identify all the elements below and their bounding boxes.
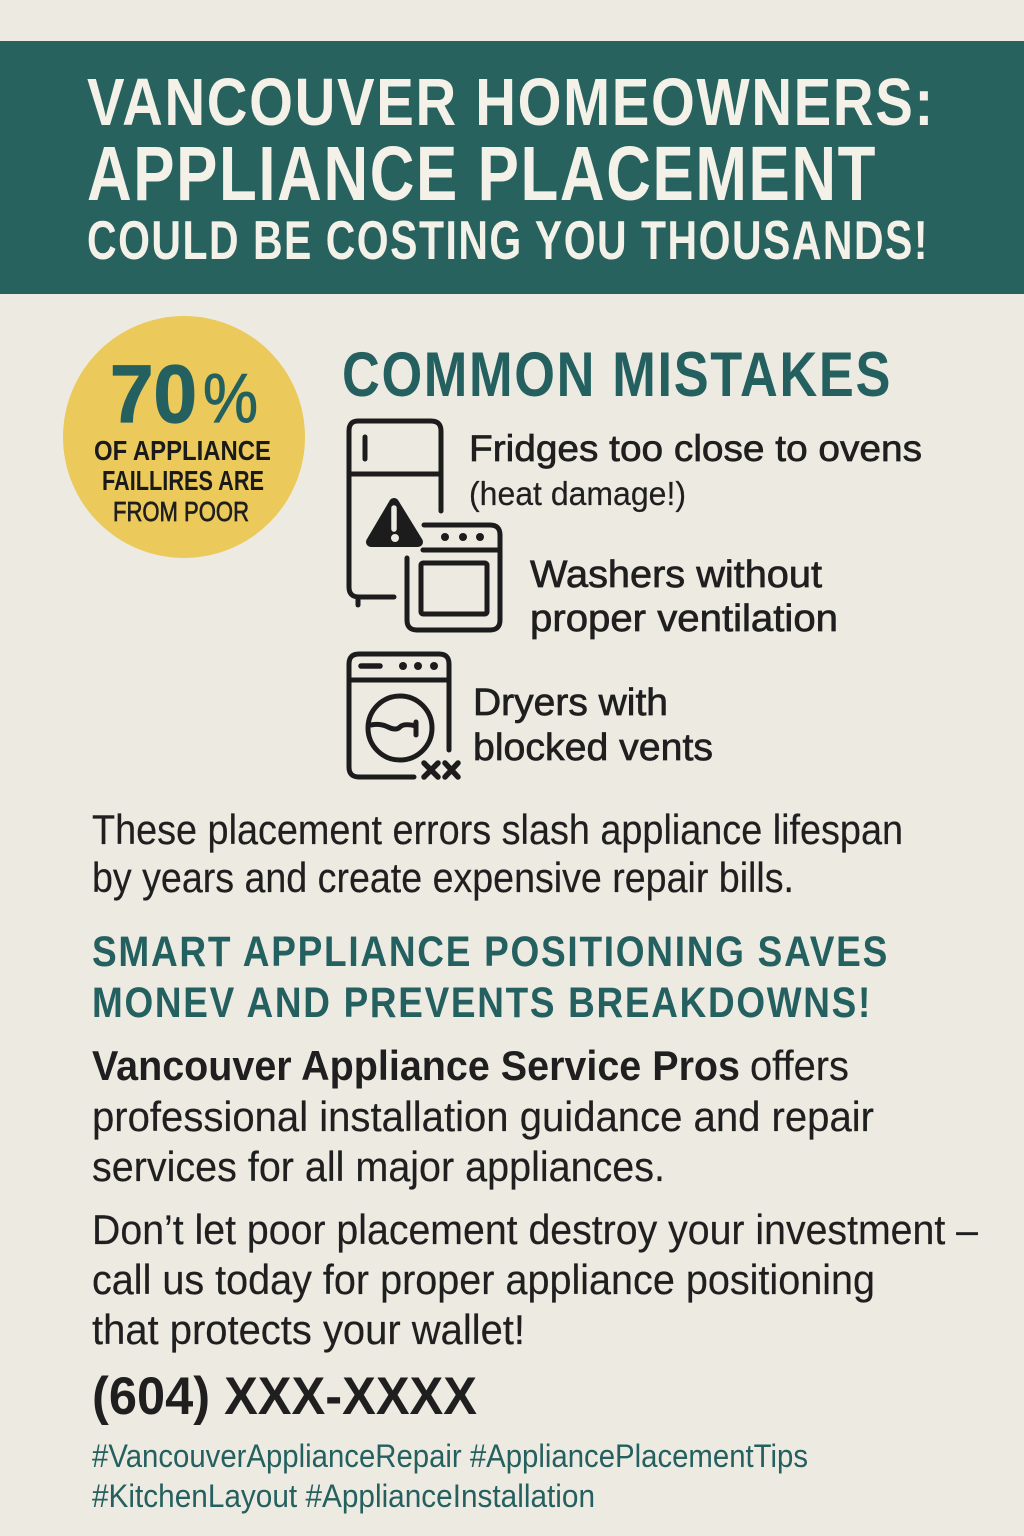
header banner: [0, 41, 1024, 294]
stat badge: 70%: FAILLIRES ARE: [102, 465, 264, 496]
paragraph: company: services for all major appliances.: [92, 1143, 665, 1190]
paragraph: call to action: Don’t let poor placement destroy your investment –: [92, 1206, 979, 1253]
subheading: smart positioning: MONEV AND PREVENTS BREAKDOWNS!: [92, 979, 872, 1027]
paragraph: company: Vancouver Appliance Service Pros: [92, 1042, 740, 1089]
stat badge: 70%: 70: [110, 349, 197, 440]
heading: common mistakes: COMMON MISTAKES: [342, 340, 892, 410]
paragraph: call to action: call us today for proper appliance positioning: [92, 1256, 875, 1303]
stat badge: 70%: %: [203, 359, 258, 437]
paragraph: company: professional installation guidance and repair: [92, 1093, 874, 1140]
paragraph: consequences: [92, 806, 903, 901]
mistake: dryers: Dryers with: [473, 682, 668, 724]
paragraph: call to action: [92, 1206, 979, 1353]
paragraph: company: offers: [750, 1042, 849, 1089]
paragraph: consequences: by years and create expensive repair bills.: [92, 854, 794, 901]
mistake: washers: Washers without: [530, 554, 822, 596]
icon: washer with crosses: [349, 654, 458, 777]
stat badge: 70%: [63, 316, 305, 558]
paragraph: consequences: These placement errors slash appliance lifespan: [92, 806, 903, 853]
phone number: (604) XXX-XXXX: [92, 1367, 477, 1426]
subheading: smart positioning: SMART APPLIANCE POSITIONING SAVES: [92, 928, 889, 976]
title: [87, 65, 935, 271]
hashtags: [92, 1438, 808, 1514]
hashtags: #VancouverApplianceRepair #AppliancePlacementTips: [92, 1438, 808, 1474]
mistake: fridges: (heat damage!): [469, 475, 686, 512]
mistake: washers: proper ventilation: [530, 598, 838, 640]
subheading: smart positioning: [92, 928, 889, 1027]
mistake: fridges: Fridges too close to ovens: [469, 428, 922, 469]
paragraph: company: [92, 1042, 874, 1190]
stat badge: 70%: FROM POOR: [113, 496, 249, 527]
mistake: fridges: [469, 428, 922, 512]
mistake: dryers: [473, 682, 713, 769]
hashtags: #KitchenLayout #ApplianceInstallation: [92, 1478, 595, 1514]
paragraph: call to action: that protects your wallet!: [92, 1306, 525, 1353]
icon: fridge and oven with warning: [349, 421, 500, 630]
stat badge: 70%: OF APPLIANCE: [94, 435, 271, 466]
mistake: washers: [530, 554, 838, 640]
mistake: dryers: blocked vents: [473, 727, 713, 769]
